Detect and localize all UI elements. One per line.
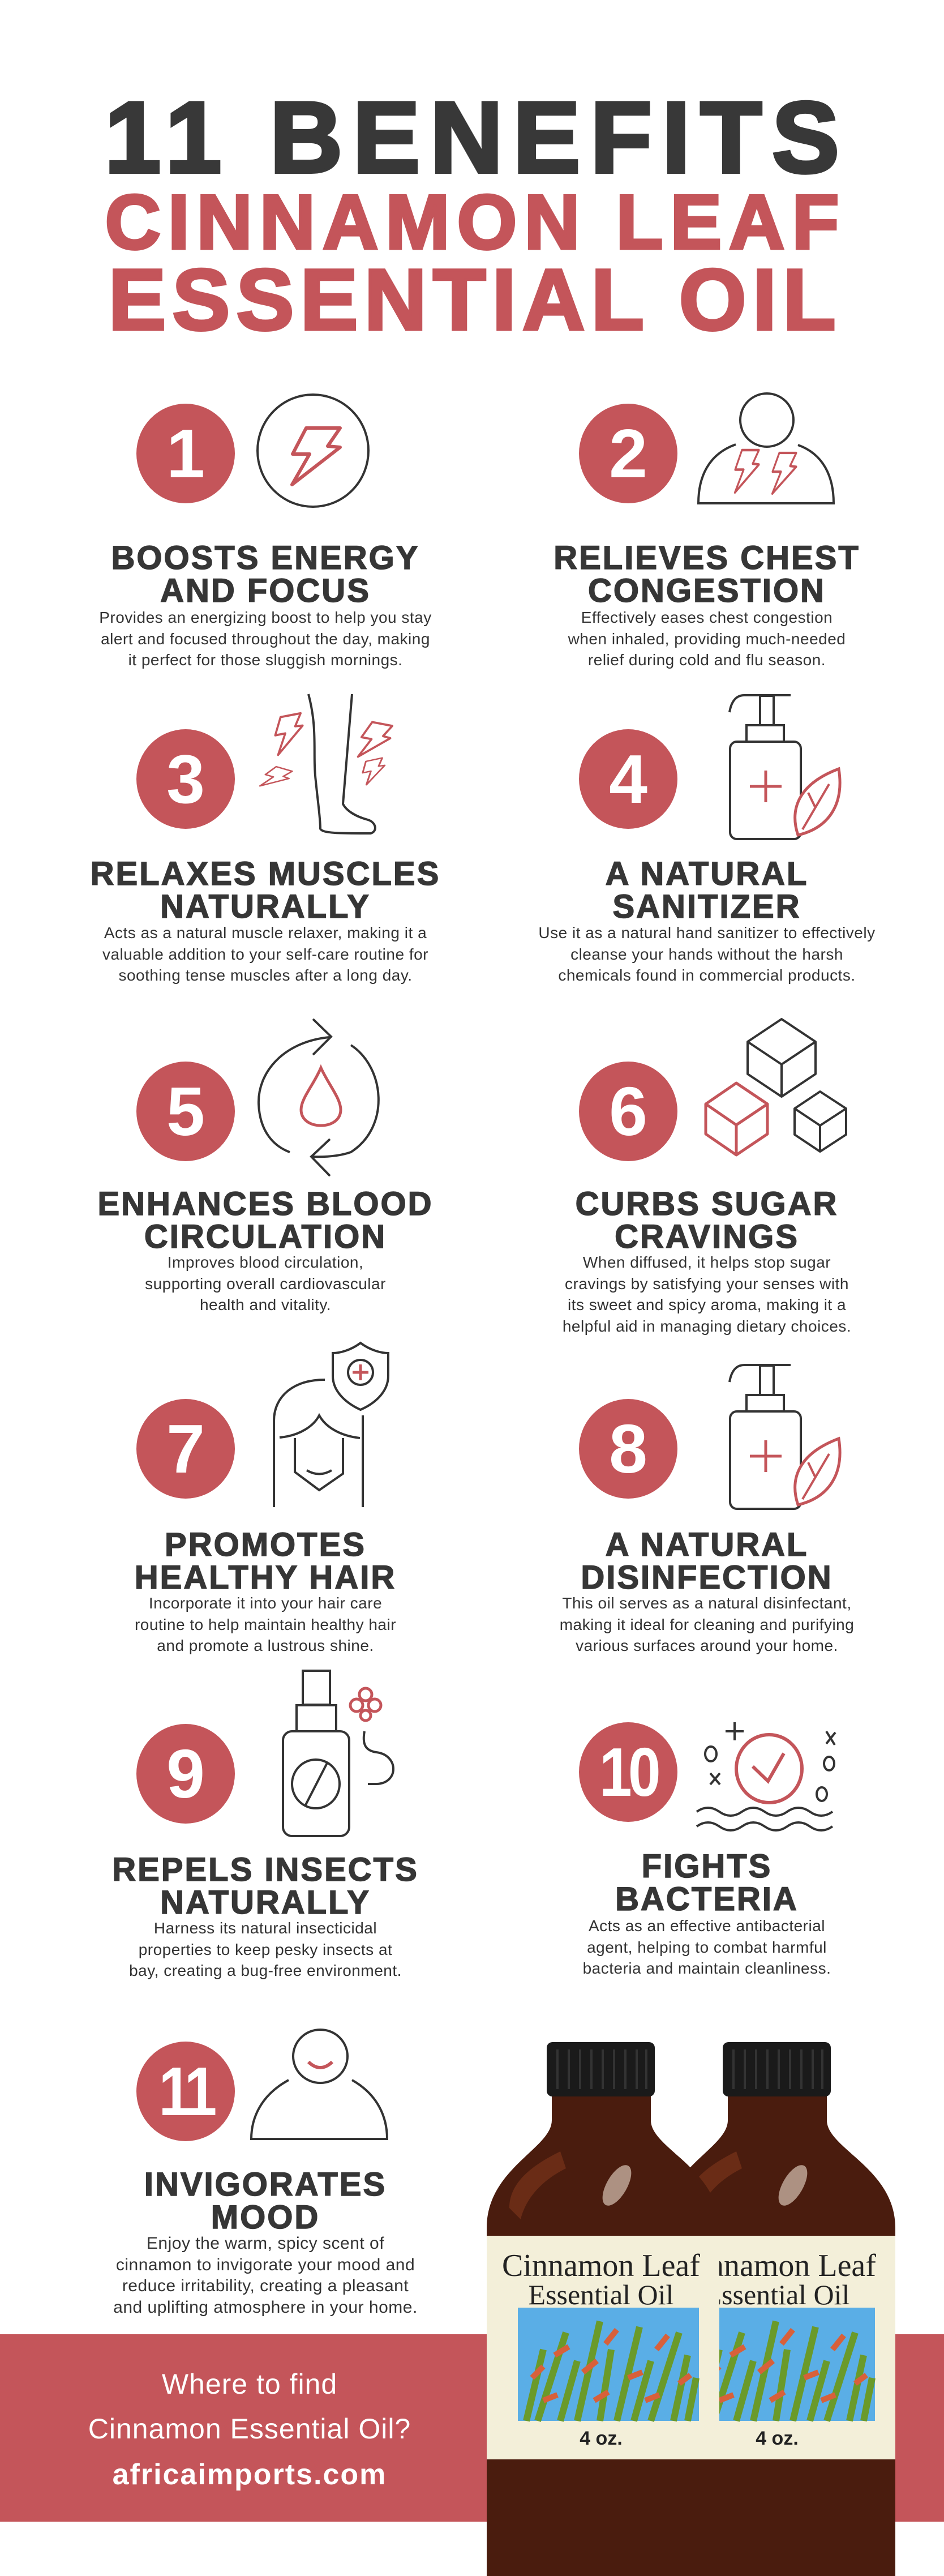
- icon 9: insect repellent spray: [283, 1671, 393, 1836]
- icon 7: woman with hair shield: [274, 1343, 388, 1507]
- number 2: [579, 404, 677, 503]
- heading 6: CURBS SUGAR: [576, 1186, 838, 1222]
- icon 6: sugar cubes: [706, 1019, 846, 1155]
- heading 10: [615, 1848, 799, 1918]
- product bottles: [487, 2042, 895, 2576]
- text 9: Harness its natural insecticidal: [154, 1919, 377, 1937]
- heading 5: ENHANCES BLOOD: [97, 1186, 434, 1222]
- footer text: [88, 2368, 411, 2491]
- number 7: 7: [166, 1410, 205, 1487]
- text 11: reduce irritability, creating a pleasant: [122, 2277, 409, 2295]
- text 6: When diffused, it helps stop sugar: [583, 1253, 831, 1271]
- text 3: valuable addition to your self-care routine for: [102, 945, 428, 962]
- heading 9: NATURALLY: [160, 1884, 371, 1921]
- text 4: cleanse your hands without the harsh: [570, 945, 843, 962]
- text 2: relief during cold and flu season.: [588, 651, 826, 669]
- where to find: Where to find: [162, 2368, 337, 2400]
- text 4: [538, 924, 876, 984]
- text 7: Incorporate it into your hair care: [149, 1594, 382, 1612]
- heading 11: [144, 2166, 387, 2236]
- website: africaimports.com: [113, 2458, 387, 2491]
- text 1: [99, 609, 432, 669]
- text 11: cinnamon to invigorate your mood and: [116, 2256, 415, 2274]
- text 9: properties to keep pesky insects at: [139, 1941, 392, 1958]
- number 1: 1: [166, 415, 205, 492]
- heading 9: REPELS INSECTS: [112, 1851, 419, 1888]
- title: [105, 81, 849, 348]
- text 5: [145, 1253, 386, 1313]
- number 4: [579, 729, 677, 829]
- text 1: it perfect for those sluggish mornings.: [128, 651, 402, 669]
- number 4: 4: [609, 741, 647, 818]
- text 6: its sweet and spicy aroma, making it a: [568, 1296, 846, 1313]
- heading 6: CRAVINGS: [615, 1218, 799, 1255]
- icon 1: energy bolt: [258, 395, 368, 507]
- cinnamon essential oil question: Cinnamon Essential Oil?: [88, 2413, 411, 2445]
- heading 8: A NATURAL: [606, 1526, 808, 1563]
- footer band: [0, 2334, 944, 2522]
- text 11: Enjoy the warm, spicy scent of: [147, 2234, 384, 2253]
- heading 4: A NATURAL: [606, 855, 808, 892]
- text 5: supporting overall cardiovascular: [145, 1275, 386, 1292]
- number 2: 2: [609, 415, 647, 492]
- number 11: 11: [158, 2053, 213, 2130]
- heading 1: [111, 540, 419, 609]
- text 6: cravings by satisfying your senses with: [565, 1275, 849, 1292]
- heading 3: RELAXES MUSCLES: [91, 855, 440, 892]
- number 8: [579, 1399, 677, 1499]
- number 9: [136, 1724, 235, 1824]
- title line 1: 11 BENEFITS: [105, 81, 849, 194]
- heading 8: [581, 1526, 833, 1596]
- heading 10: FIGHTS: [642, 1848, 772, 1885]
- heading 5: [97, 1186, 434, 1255]
- number 3: 3: [166, 741, 205, 818]
- heading 6: [576, 1186, 838, 1255]
- text 4: Use it as a natural hand sanitizer to effectively: [538, 924, 876, 942]
- icon 3: leg with muscle pain: [260, 694, 392, 833]
- heading 2: CONGESTION: [588, 572, 826, 609]
- number 10: [579, 1722, 677, 1822]
- heading 3: NATURALLY: [160, 888, 371, 925]
- number 5: [136, 1062, 235, 1161]
- back bottle: [663, 2042, 895, 2576]
- heading 3: [91, 855, 440, 925]
- heading 11: INVIGORATES: [144, 2166, 387, 2203]
- text 2: when inhaled, providing much-needed: [568, 630, 846, 648]
- text 5: health and vitality.: [200, 1296, 331, 1313]
- front bottle: [487, 2042, 719, 2576]
- text 4: chemicals found in commercial products.: [558, 966, 856, 984]
- icon 8: disinfection pump bottle: [730, 1365, 840, 1509]
- icon 5: circulation arrows and drop: [259, 1019, 379, 1176]
- text 3: Acts as a natural muscle relaxer, making it a: [104, 924, 427, 942]
- text 11: [113, 2234, 418, 2317]
- heading 9: [112, 1851, 419, 1921]
- heading 2: RELIEVES CHEST: [553, 540, 860, 576]
- heading 7: HEALTHY HAIR: [135, 1559, 396, 1596]
- heading 7: [135, 1526, 396, 1596]
- text 5: Improves blood circulation,: [168, 1253, 363, 1271]
- text 2: Effectively eases chest congestion: [581, 609, 833, 626]
- number 8: 8: [609, 1410, 647, 1487]
- text 8: This oil serves as a natural disinfectant,: [562, 1594, 852, 1612]
- number 9: 9: [166, 1735, 205, 1812]
- text 7: and promote a lustrous shine.: [157, 1637, 374, 1654]
- icon 11: smiling person: [251, 2030, 387, 2139]
- text 10: bacteria and maintain cleanliness.: [583, 1959, 831, 1977]
- text 1: alert and focused throughout the day, making: [101, 630, 430, 648]
- number 6: 6: [609, 1073, 647, 1150]
- title line 2: CINNAMON LEAF: [105, 179, 846, 265]
- heading 1: AND FOCUS: [160, 572, 371, 609]
- heading 10: BACTERIA: [615, 1881, 799, 1918]
- icon 2: chest congestion person: [698, 393, 834, 503]
- text 11: and uplifting atmosphere in your home.: [113, 2297, 418, 2317]
- number 6: [579, 1062, 677, 1161]
- heading 2: [553, 540, 860, 609]
- title line 3: ESSENTIAL OIL: [108, 251, 842, 348]
- number 5: 5: [166, 1073, 205, 1150]
- heading 8: DISINFECTION: [581, 1559, 833, 1596]
- icon 4: sanitizer pump bottle: [730, 695, 840, 839]
- text 9: [129, 1919, 402, 1979]
- text 8: [560, 1594, 854, 1654]
- number 10: 10: [599, 1734, 657, 1811]
- heading 4: SANITIZER: [612, 888, 801, 925]
- heading 11: MOOD: [211, 2199, 320, 2236]
- heading 1: BOOSTS ENERGY: [111, 540, 419, 576]
- text 8: making it ideal for cleaning and purifying: [560, 1616, 854, 1633]
- icon 10: bacteria check: [697, 1722, 835, 1830]
- number 11: [136, 2042, 235, 2141]
- text 8: various surfaces around your home.: [576, 1637, 838, 1654]
- number 3: [136, 729, 235, 829]
- number 1: [136, 404, 235, 503]
- text 10: [583, 1917, 831, 1977]
- text 10: Acts as an effective antibacterial: [589, 1917, 825, 1935]
- text 2: [568, 609, 846, 669]
- text 7: routine to help maintain healthy hair: [135, 1616, 396, 1633]
- text 6: [563, 1253, 851, 1335]
- text 7: [135, 1594, 396, 1654]
- heading 4: [606, 855, 808, 925]
- text 1: Provides an energizing boost to help you stay: [99, 609, 432, 626]
- heading 5: CIRCULATION: [144, 1218, 387, 1255]
- text 9: bay, creating a bug-free environment.: [129, 1962, 402, 1979]
- text 3: soothing tense muscles after a long day.: [118, 966, 413, 984]
- heading 7: PROMOTES: [165, 1526, 366, 1563]
- text 10: agent, helping to combat harmful: [587, 1939, 827, 1955]
- text 3: [102, 924, 428, 984]
- text 6: helpful aid in managing dietary choices.: [563, 1317, 851, 1335]
- number 7: [136, 1399, 235, 1499]
